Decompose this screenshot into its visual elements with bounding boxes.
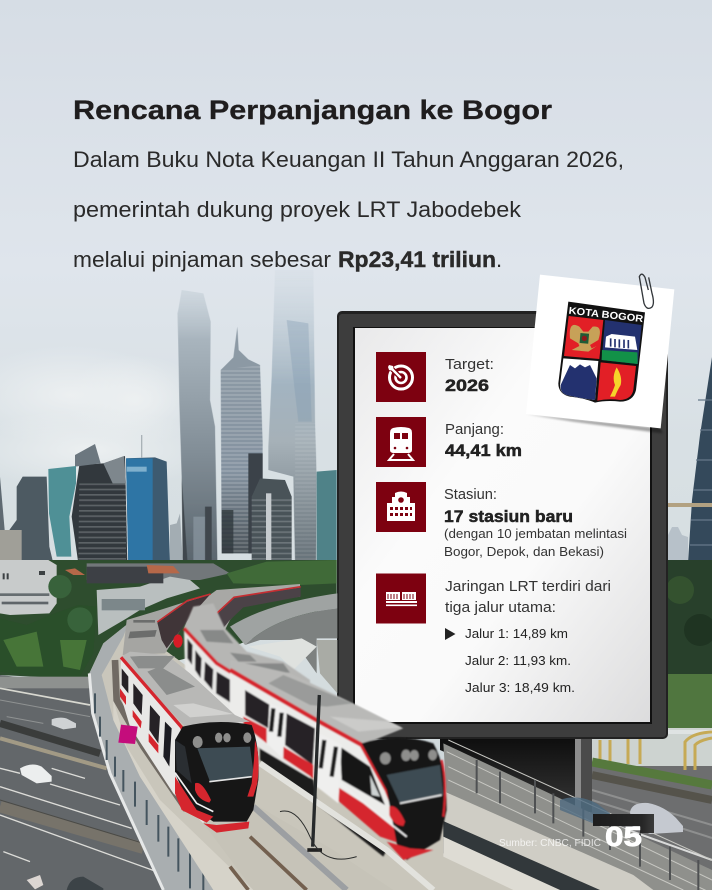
line 2 length: Jalur 2: 11,93 km. [465,653,571,668]
note shadow [526,414,663,433]
distant low buildings [170,513,183,560]
page number block [593,814,654,833]
building: grey mid [97,577,200,635]
lower red stripes [120,688,158,753]
car: silver small [52,718,76,729]
building: mid-rise white [252,478,292,562]
parapet rim [89,673,163,890]
page number: 05 [605,821,642,852]
carriage rear section [184,603,310,797]
label: length: Panjang: [445,421,504,438]
right roadway [590,728,712,890]
icon: target [376,352,426,402]
left trackbed [115,660,187,810]
intro line 1: Dalam Buku Nota Keuangan II Tahun Anggaran 2026, [73,147,624,172]
emblem: Kota Bogor [558,302,645,403]
car: white [20,765,52,783]
billboard screen [355,328,650,722]
title: Rencana Perpanjangan ke Bogor [73,95,553,125]
railing lower right [433,740,712,890]
item: length [376,417,522,467]
billboard [337,311,668,812]
outer viaduct parapet [89,623,217,890]
bullet arrow [445,628,456,640]
noise barrier posts [95,693,203,890]
left train [118,634,259,833]
intro line 3: melalui pinjaman sebesar [73,247,331,272]
tower: twisted left [178,290,217,563]
car: silver suv [630,803,683,834]
intro line 3: Rp23,41 triliun [338,247,496,272]
value: length: 44,41 km [445,441,522,460]
elevated viaduct [89,593,712,890]
curved viaduct background [230,593,337,693]
roof [121,652,250,727]
icon: station [376,482,426,532]
item: target [376,352,494,402]
left train cab [175,722,259,833]
icon: train [376,417,426,467]
note: bridges line 1: (dengan 10 jembatan melintasi [444,527,627,541]
magenta marker [118,725,138,744]
line 3 length: Jalur 3: 18,49 km. [465,680,575,695]
car: blurred blue [560,797,610,823]
far carriages [123,584,301,655]
city skyline [0,270,337,565]
network intro line 1: Jaringan LRT terdiri dari [445,579,611,595]
emblem panel: mountain [560,358,598,400]
right train [184,603,447,860]
red balloon [173,634,183,648]
logo note [526,274,674,433]
label: stations: Stasiun: [444,486,497,503]
network intro line 2: tiga jalur utama: [445,600,556,616]
icon: paperclip [639,274,653,308]
note paper [526,275,674,428]
right distant tower and crane [668,357,712,566]
tower: central striped [221,327,263,553]
emblem panel: blue palace [602,320,642,364]
billboard underside shadow [440,738,575,810]
walkway [113,700,253,890]
palm trees [0,575,97,677]
emblem panel: red garuda [564,316,603,359]
tower: right foggy [268,270,317,560]
left far carriage [123,594,211,655]
value: 2026: 2026 [445,376,489,395]
carriage front section [230,660,447,860]
source credit: Sumber: CNBC, FIDIC [499,838,601,849]
building: grey left [0,477,53,563]
intro line 3: . [496,247,502,272]
emblem panel: flame [597,362,636,401]
icon: rail track [376,574,426,624]
right train cab [340,737,447,860]
billboard frame [337,311,668,739]
low-rise rooftops [87,563,230,580]
road area lower left [0,675,173,890]
windows [122,668,160,743]
building: blue glass [126,435,170,565]
body [120,658,207,823]
line 1 length: Jalur 1: 14,89 km [465,626,568,641]
intro line 2: pemerintah dukung proyek LRT Jabodebek [73,197,522,222]
tracks and pylon [230,695,433,890]
emblem title: KOTA BOGOR [568,306,644,325]
clouds [0,345,220,490]
billboard stand [575,738,592,812]
right far carriage [184,584,301,630]
building: dark striped [72,444,127,563]
item: stations [376,482,627,559]
viaduct deck [89,623,667,890]
right trees [660,560,712,734]
note: bridges line 2: Bogor, Depok, dan Bekasi) [444,545,604,559]
item: network [376,574,611,695]
distant city strip and trees [0,560,337,680]
value: stations: 17 stasiun baru [444,507,573,526]
right trackbed [173,783,393,890]
building: teal right [317,470,337,560]
label: target: Target: [445,356,494,373]
building: teal left [48,466,76,557]
building: white left [0,560,57,615]
